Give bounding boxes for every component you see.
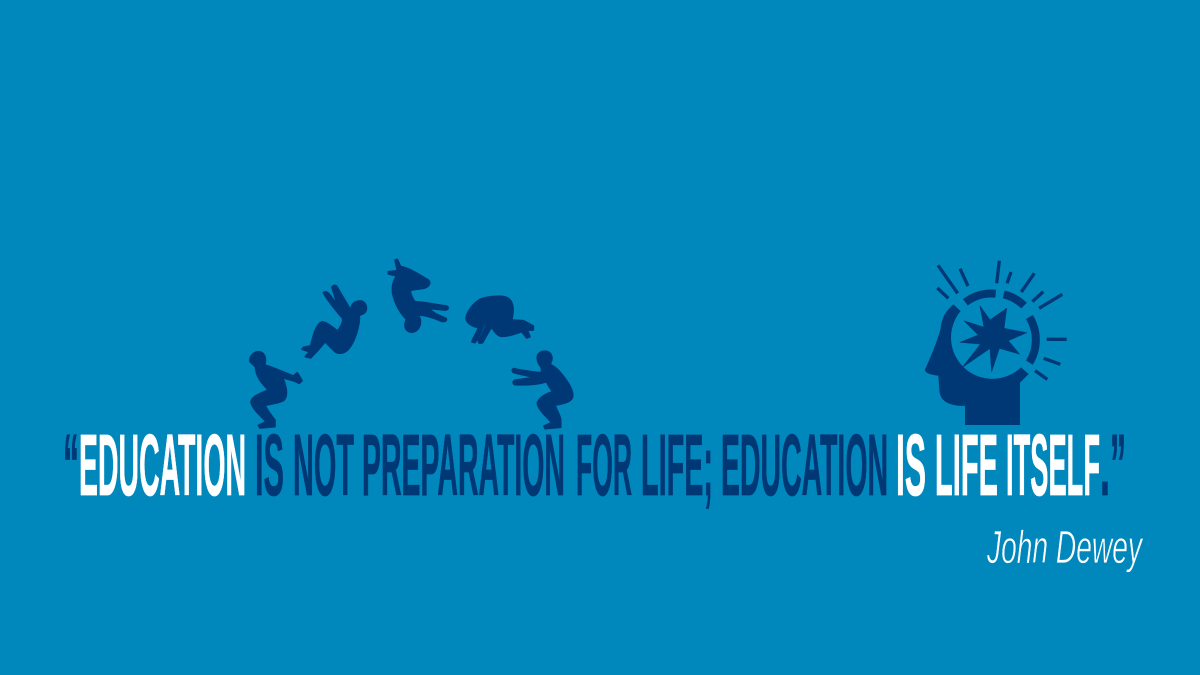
figure: rising backwards: [302, 285, 366, 358]
quote: [63, 417, 1126, 514]
text: ”: [1110, 417, 1126, 514]
figure: crouching before jump: [250, 352, 302, 428]
quote: middle phrase: NOT: [293, 417, 354, 514]
quote: middle phrase: IS: [255, 417, 284, 514]
head silhouette: [925, 304, 1029, 425]
illustration: backflip sequence: [250, 259, 573, 429]
icon: head with bursting star: [925, 261, 1067, 425]
closing punctuation: .: [1100, 417, 1110, 514]
rays: [937, 261, 1067, 379]
figure: landing crouch: [512, 351, 573, 429]
quote: IS LIFE ITSELF: IS: [896, 417, 926, 514]
quote: middle phrase: FOR: [576, 417, 632, 514]
quote: IS LIFE ITSELF: LIFE: [935, 417, 998, 514]
quote: middle phrase: PREPARATION: [362, 417, 565, 514]
ring segments: [965, 293, 1036, 363]
star: [960, 306, 1027, 372]
figure: inverted at top: [388, 259, 448, 332]
quote: “: [63, 417, 79, 514]
quote: EDUCATION: [79, 417, 246, 514]
quote: middle phrase: LIFE;: [641, 417, 713, 514]
figure: tucked descending: [466, 296, 533, 343]
